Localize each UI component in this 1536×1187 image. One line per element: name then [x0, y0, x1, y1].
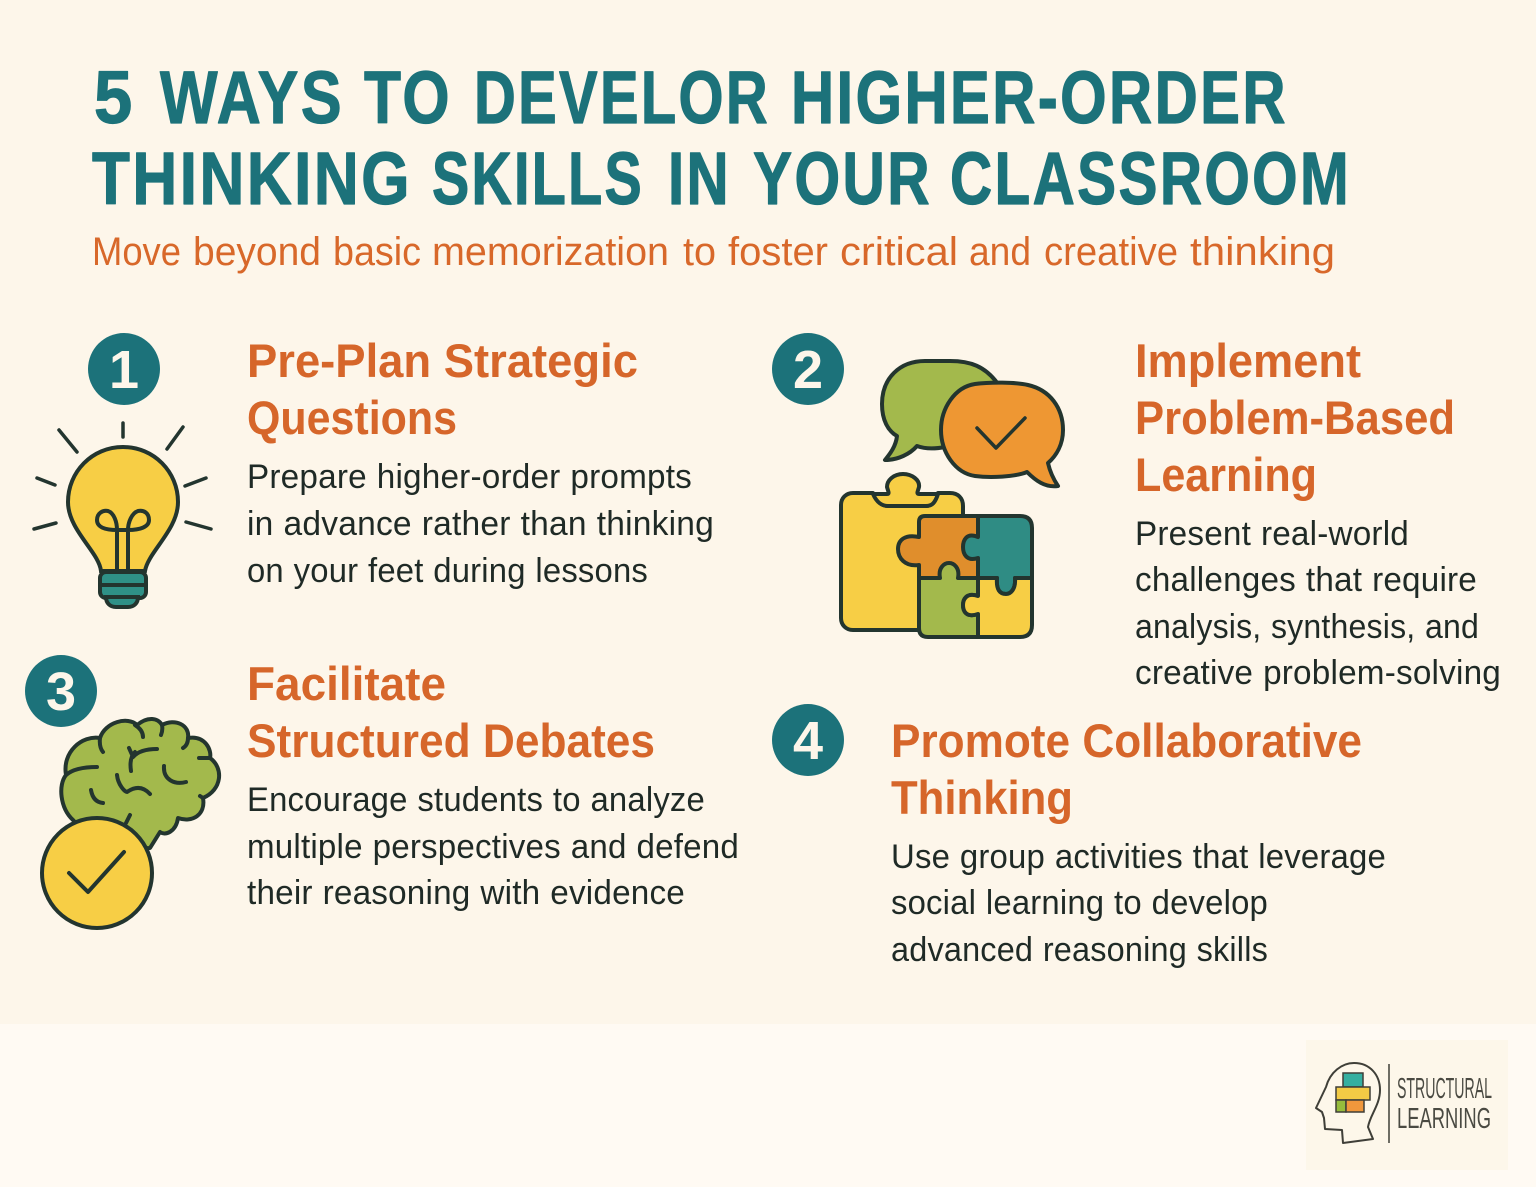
icon: light bulb: [34, 423, 211, 607]
subtitle: memorization: [432, 230, 669, 274]
title: [92, 56, 1351, 220]
body text 1: [247, 458, 714, 590]
body text 2: Present real-world: [1135, 515, 1409, 553]
body text 2: challenges that require: [1135, 561, 1477, 599]
title: YOUR: [753, 137, 932, 220]
subtitle: thinking: [1190, 230, 1335, 274]
body text 2: creative problem-solving: [1135, 654, 1501, 692]
heading 3: Structured Debates: [247, 714, 655, 767]
subtitle: foster: [728, 230, 828, 274]
title: WAYS: [160, 56, 344, 139]
heading 1: [247, 334, 638, 444]
title: CLASSROOM: [950, 137, 1351, 220]
body text 2: [1135, 515, 1501, 692]
icon: clipboard with puzzle: [841, 474, 1032, 637]
heading 1: Questions: [247, 391, 457, 444]
logo: structural learning: [1306, 1040, 1508, 1170]
number badge 4: 4: [793, 711, 823, 771]
heading 3: Facilitate: [247, 657, 446, 710]
icon: brain with check: [42, 719, 219, 928]
heading 2: Learning: [1135, 448, 1317, 501]
subtitle: to: [683, 230, 716, 274]
heading 4: Thinking: [891, 771, 1073, 824]
title: IN: [668, 137, 731, 220]
heading 4: Promote Collaborative: [891, 714, 1362, 767]
icon: head with blocks: [1316, 1063, 1389, 1143]
title: TO: [364, 56, 452, 139]
body text 3: [247, 781, 739, 912]
heading 2: Implement: [1135, 334, 1361, 387]
number badge 2: 2: [793, 340, 823, 400]
number badge 3: 3: [46, 662, 76, 722]
subtitle: basic: [333, 230, 421, 274]
body text 4: Use group activities that leverage: [891, 838, 1386, 876]
body text 1: in advance rather than thinking: [247, 505, 714, 543]
heading 2: Problem-Based: [1135, 391, 1455, 444]
subtitle: beyond: [193, 230, 321, 274]
subtitle: creative: [1044, 230, 1178, 274]
panel: step 4 promote collaborative thinking: [772, 704, 1386, 969]
subtitle: Move: [92, 230, 181, 274]
number badge 3: [25, 655, 97, 727]
logo wordmark: [1397, 1073, 1492, 1135]
number badge 2: [772, 333, 844, 405]
panel: step 3 facilitate structured debates: [25, 655, 739, 928]
title: DEVELOR: [474, 56, 770, 139]
body text 4: advanced reasoning skills: [891, 931, 1268, 969]
icon: speech bubbles: [882, 361, 1063, 486]
number badge 1: 1: [109, 340, 139, 400]
body text 3: their reasoning with evidence: [247, 874, 685, 912]
title: SKILLS: [432, 137, 644, 220]
title: HIGHER-ORDER: [791, 56, 1288, 139]
heading 4: [891, 714, 1362, 824]
panel: step 1 pre-plan strategic questions: [34, 333, 714, 607]
number badge 4: [772, 704, 844, 776]
body text 4: social learning to develop: [891, 884, 1268, 922]
title: 5: [94, 56, 135, 139]
panel: step 2 implement problem-based learning: [772, 333, 1501, 692]
heading 2: [1135, 334, 1455, 501]
body text 3: multiple perspectives and defend: [247, 828, 739, 866]
number badge 1: [88, 333, 160, 405]
subtitle: critical: [840, 230, 958, 274]
subtitle: [92, 230, 1335, 274]
heading 3: [247, 657, 655, 767]
body text 2: analysis, synthesis, and: [1135, 608, 1479, 646]
title: THINKING: [92, 137, 412, 220]
body text 4: [891, 838, 1386, 969]
subtitle: and: [969, 230, 1031, 274]
body text 1: Prepare higher-order prompts: [247, 458, 692, 496]
body text 3: Encourage students to analyze: [247, 781, 705, 819]
body text 1: on your feet during lessons: [247, 552, 648, 590]
heading 1: Pre-Plan Strategic: [247, 334, 638, 387]
